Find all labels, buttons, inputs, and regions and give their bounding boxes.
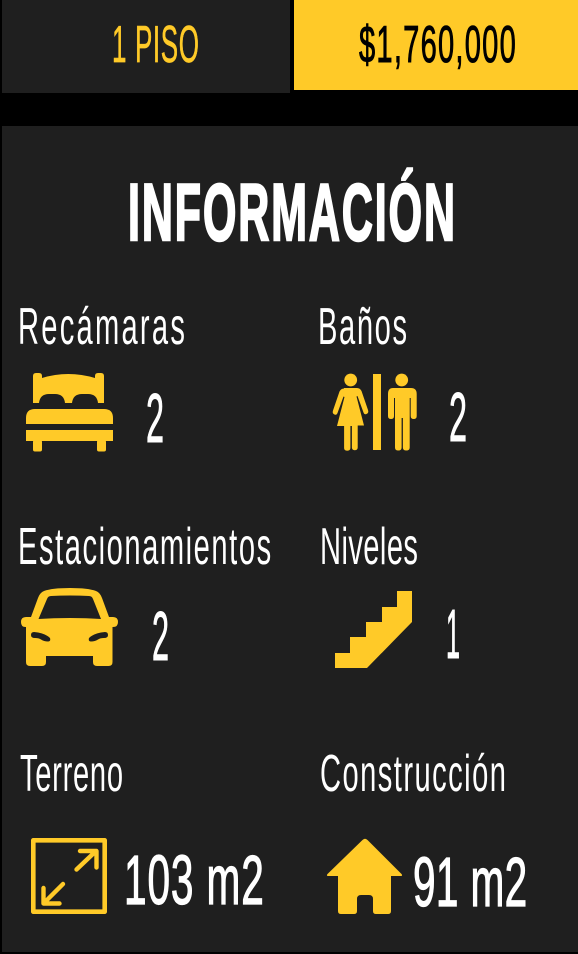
item: parking: 2 bbox=[152, 597, 169, 675]
label: levels: Niveles bbox=[320, 517, 418, 575]
icon: car bbox=[21, 588, 118, 666]
value: land: 103 m2 bbox=[124, 842, 264, 920]
panel: information: 2 bbox=[449, 378, 467, 456]
label: bedrooms: Recámaras bbox=[18, 297, 185, 355]
title: INFORMACIÓN bbox=[128, 166, 455, 257]
value: construction: 91 m2 bbox=[413, 844, 527, 922]
panel: price bbox=[294, 0, 578, 90]
item: bathrooms bbox=[318, 297, 467, 456]
label: land: Terreno bbox=[20, 744, 123, 802]
item: levels bbox=[320, 517, 460, 673]
item: land bbox=[20, 744, 264, 920]
floors label: 1 PISO bbox=[112, 15, 199, 73]
label: construction: Construcción bbox=[320, 744, 506, 802]
item: construction bbox=[320, 744, 527, 922]
panel: information: 1 bbox=[446, 595, 460, 673]
panel: floors bbox=[2, 0, 290, 93]
icon: bed bbox=[26, 373, 113, 452]
icon: stairs bbox=[335, 591, 412, 668]
price: $1,760,000 bbox=[359, 15, 516, 73]
item: bedrooms bbox=[18, 297, 185, 457]
icon: expand bbox=[33, 840, 105, 912]
label: bathrooms: Baños bbox=[318, 297, 407, 355]
icon: house bbox=[327, 839, 402, 914]
item: parking bbox=[18, 517, 271, 675]
item: bedrooms: 2 bbox=[146, 379, 164, 457]
label: parking: Estacionamientos bbox=[18, 517, 271, 575]
icon: restroom bbox=[333, 374, 417, 451]
